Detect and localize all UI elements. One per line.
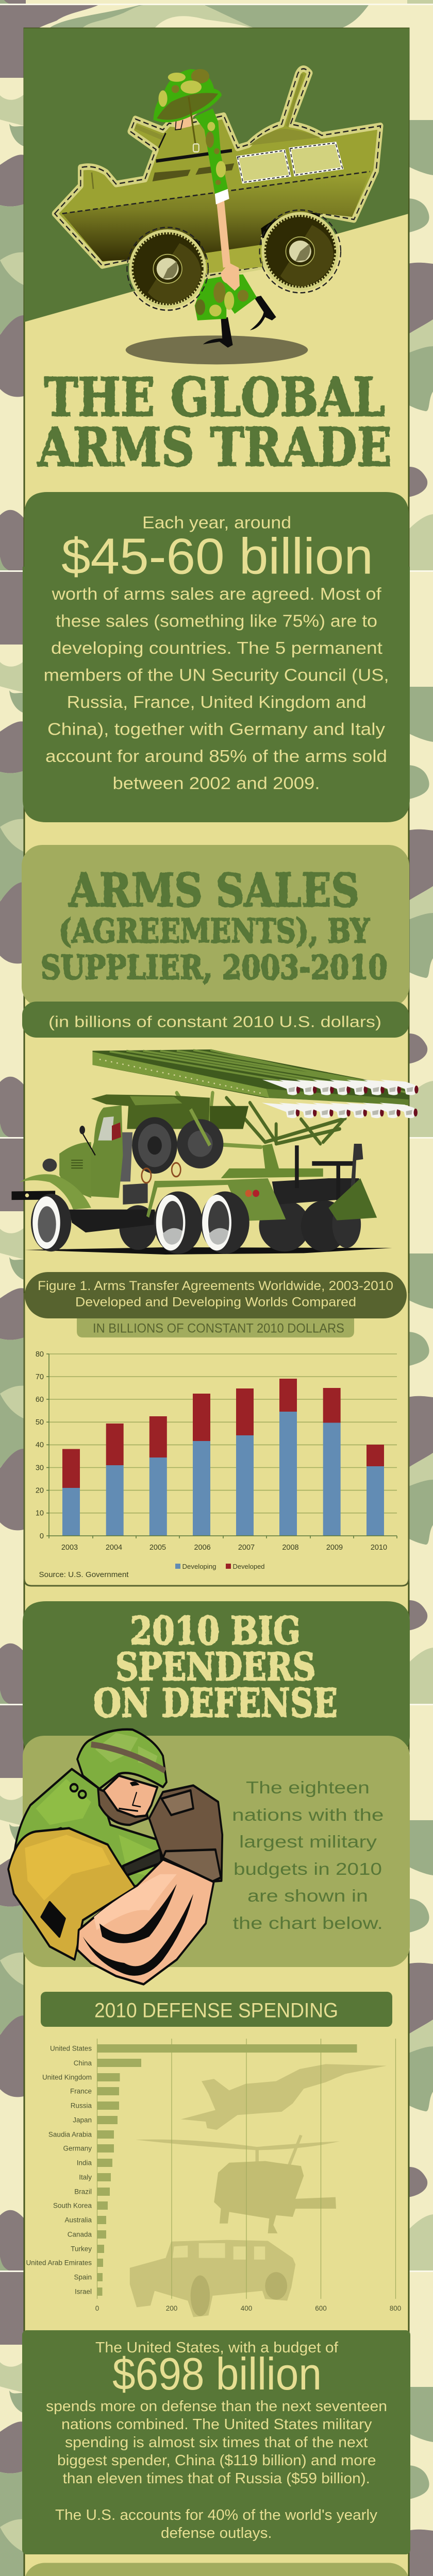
- bar chart: arms transfer agreements: 60: [36, 1396, 44, 1404]
- panel: eighteen nations text: budgets in 2010: [234, 1859, 382, 1878]
- panel: intro stats: China), together with Germany and Italy: [47, 719, 386, 739]
- panel: eighteen nations text: [23, 1736, 410, 1967]
- panel: figure 1 chart frame: [24, 1293, 409, 1586]
- hero panel: soldier carrying armored vehicle: [24, 28, 409, 364]
- panel: united states budget: $698 billion: [112, 2348, 322, 2399]
- bar chart: 2010 defense spending by country: South Korea: [53, 2202, 92, 2210]
- panel: eighteen nations text: largest military: [239, 1832, 377, 1851]
- panel: united states budget: than eleven times that of Russia ($59 billion).: [63, 2470, 370, 2487]
- title: [37, 366, 392, 479]
- panel: united states budget: spending is almost six times that of the next: [65, 2434, 368, 2451]
- panel: intro stats: $45-60 billion: [61, 528, 373, 584]
- subtitle pill: [22, 1002, 409, 1038]
- panel: intro stats: members of the UN Security Council (US,: [44, 666, 389, 684]
- bar chart: arms transfer agreements: 2004: [106, 1544, 122, 1552]
- illustration: muscular soldier flexing: [8, 1730, 222, 1984]
- figure title pill: Developed and Developing Worlds Compared: [75, 1295, 356, 1310]
- bar chart: 2010 defense spending by country: Russia: [71, 2102, 92, 2110]
- bar chart: 2010 defense spending by country: United Arab Emirates: [26, 2259, 92, 2267]
- bar chart: 2010 defense spending by country: United States: [50, 2045, 92, 2053]
- panel: intro stats: between 2002 and 2009.: [112, 774, 320, 792]
- figure unit label: IN BILLIONS OF CONSTANT 2010 DOLLARS: [93, 1321, 344, 1336]
- panel: arms sales heading: ARMS SALES: [69, 863, 359, 917]
- subtitle pill: (in billions of constant 2010 U.S. dollars): [48, 1013, 381, 1031]
- bar chart: 2010 defense spending by country: Brazil: [74, 2188, 92, 2196]
- bar chart: arms transfer agreements: 2010: [371, 1544, 387, 1552]
- bar chart: arms transfer agreements: 2007: [238, 1544, 255, 1552]
- panel: big spenders heading: SPENDERS: [115, 1645, 315, 1689]
- panel: united states budget: defense outlays.: [161, 2525, 272, 2541]
- bar chart: arms transfer agreements: 20: [36, 1487, 44, 1495]
- panel: intro stats: [23, 492, 410, 822]
- chart legend: [175, 1563, 265, 1570]
- panel: united states budget: The United States, with a budget of: [95, 2340, 338, 2356]
- bar chart: 2010 defense spending by country: 800: [390, 2304, 401, 2312]
- section heading bar: 2010 defense spending: 2010 DEFENSE SPENDING: [94, 1999, 338, 2022]
- panel: united states budget: nations combined. The United States military: [61, 2416, 372, 2433]
- bar chart: 2010 defense spending by country: Italy: [79, 2174, 92, 2181]
- panel: intro stats: Each year, around: [142, 513, 291, 532]
- bar chart: 2010 defense spending by country: Turkey: [71, 2245, 92, 2253]
- panel: big spenders heading: 2010 BIG: [130, 1609, 301, 1653]
- bar chart: arms transfer agreements: [36, 1350, 397, 1552]
- bar chart: arms transfer agreements: 2003: [61, 1544, 78, 1552]
- panel: united states budget: The U.S. accounts for 40% of the world's yearly: [55, 2507, 378, 2523]
- figure title pill: Figure 1. Arms Transfer Agreements Worldwide, 2003-2010: [38, 1279, 393, 1293]
- bar chart: 2010 defense spending by country: 400: [241, 2304, 252, 2312]
- section heading bar: 2010 defense spending: [41, 1992, 392, 2027]
- bar chart: arms transfer agreements: 40: [36, 1441, 44, 1449]
- bar chart: 2010 defense spending by country: China: [74, 2059, 92, 2067]
- bar chart: arms transfer agreements: 0: [40, 1532, 44, 1540]
- bar chart: arms transfer agreements: 2006: [194, 1544, 211, 1552]
- panel: intro stats: developing countries. The 5 permanent: [51, 638, 382, 657]
- panel: eighteen nations text: the chart below.: [233, 1913, 383, 1933]
- panel: intro stats: Russia, France, United Kingdom and: [67, 692, 367, 711]
- panel: arms sales heading: [22, 845, 409, 1007]
- figure title pill: [25, 1272, 407, 1318]
- panel: eighteen nations text: nations with the: [232, 1805, 384, 1824]
- bar chart: 2010 defense spending by country: 200: [166, 2304, 177, 2312]
- panel: big spenders heading: [23, 1601, 410, 1757]
- panel: big spenders heading: ON DEFENSE: [93, 1680, 338, 1726]
- panel: top 30 heading: [24, 2563, 409, 2576]
- chart legend: Developed: [233, 1563, 265, 1570]
- bar chart: 2010 defense spending by country: 600: [315, 2304, 327, 2312]
- panel: eighteen nations text: The eighteen: [246, 1778, 370, 1797]
- bar chart: 2010 defense spending by country: Israel: [75, 2288, 92, 2296]
- bar chart: arms transfer agreements: 70: [36, 1373, 44, 1381]
- panel: united states budget: biggest spender, China ($119 billion) and more: [57, 2452, 376, 2469]
- bar chart: 2010 defense spending by country: France: [70, 2088, 92, 2095]
- panel: intro stats: worth of arms sales are agreed. Most of: [52, 584, 382, 603]
- bar chart: 2010 defense spending by country: Saudia Arabia: [48, 2131, 92, 2139]
- bar chart: arms transfer agreements: 2005: [149, 1544, 166, 1552]
- bar chart: 2010 defense spending by country: 0: [95, 2304, 99, 2312]
- bar chart: 2010 defense spending by country: Germany: [63, 2145, 92, 2153]
- bar chart: 2010 defense spending by country: Spain: [74, 2274, 92, 2281]
- panel: united states budget: spends more on defense than the next seventeen: [46, 2398, 387, 2415]
- panel: intro stats: these sales (something like 75%) are to: [56, 611, 377, 631]
- watermark: jet, helicopter and humvee silhouettes: [130, 2064, 387, 2317]
- bar chart: 2010 defense spending by country: Australia: [64, 2216, 92, 2224]
- bar chart: 2010 defense spending by country: Japan: [73, 2116, 92, 2124]
- bar chart: arms transfer agreements: 2009: [326, 1544, 343, 1552]
- bar chart: arms transfer agreements: 50: [36, 1418, 44, 1427]
- panel: intro stats: account for around 85% of the arms sold: [45, 747, 387, 766]
- panel: arms sales heading: (AGREEMENTS), BY: [59, 912, 370, 951]
- bar chart: 2010 defense spending by country: [26, 2039, 401, 2312]
- bar chart: arms transfer agreements: 30: [36, 1464, 44, 1472]
- illustration: rocket launcher truck: [11, 1049, 419, 1255]
- bar chart: arms transfer agreements: 80: [36, 1350, 44, 1359]
- panel: eighteen nations text: are shown in: [247, 1886, 368, 1905]
- panel: united states budget: [22, 2330, 410, 2554]
- bar chart: 2010 defense spending by country: India: [77, 2159, 92, 2167]
- bar chart: arms transfer agreements: 10: [36, 1510, 44, 1518]
- bar chart: 2010 defense spending by country: United Kingdom: [42, 2074, 92, 2081]
- bar chart: arms transfer agreements: 2008: [282, 1544, 299, 1552]
- chart source: Source: U.S. Government: [39, 1570, 129, 1579]
- chart legend: Developing: [182, 1563, 216, 1570]
- bar chart: 2010 defense spending by country: Canada: [68, 2231, 92, 2239]
